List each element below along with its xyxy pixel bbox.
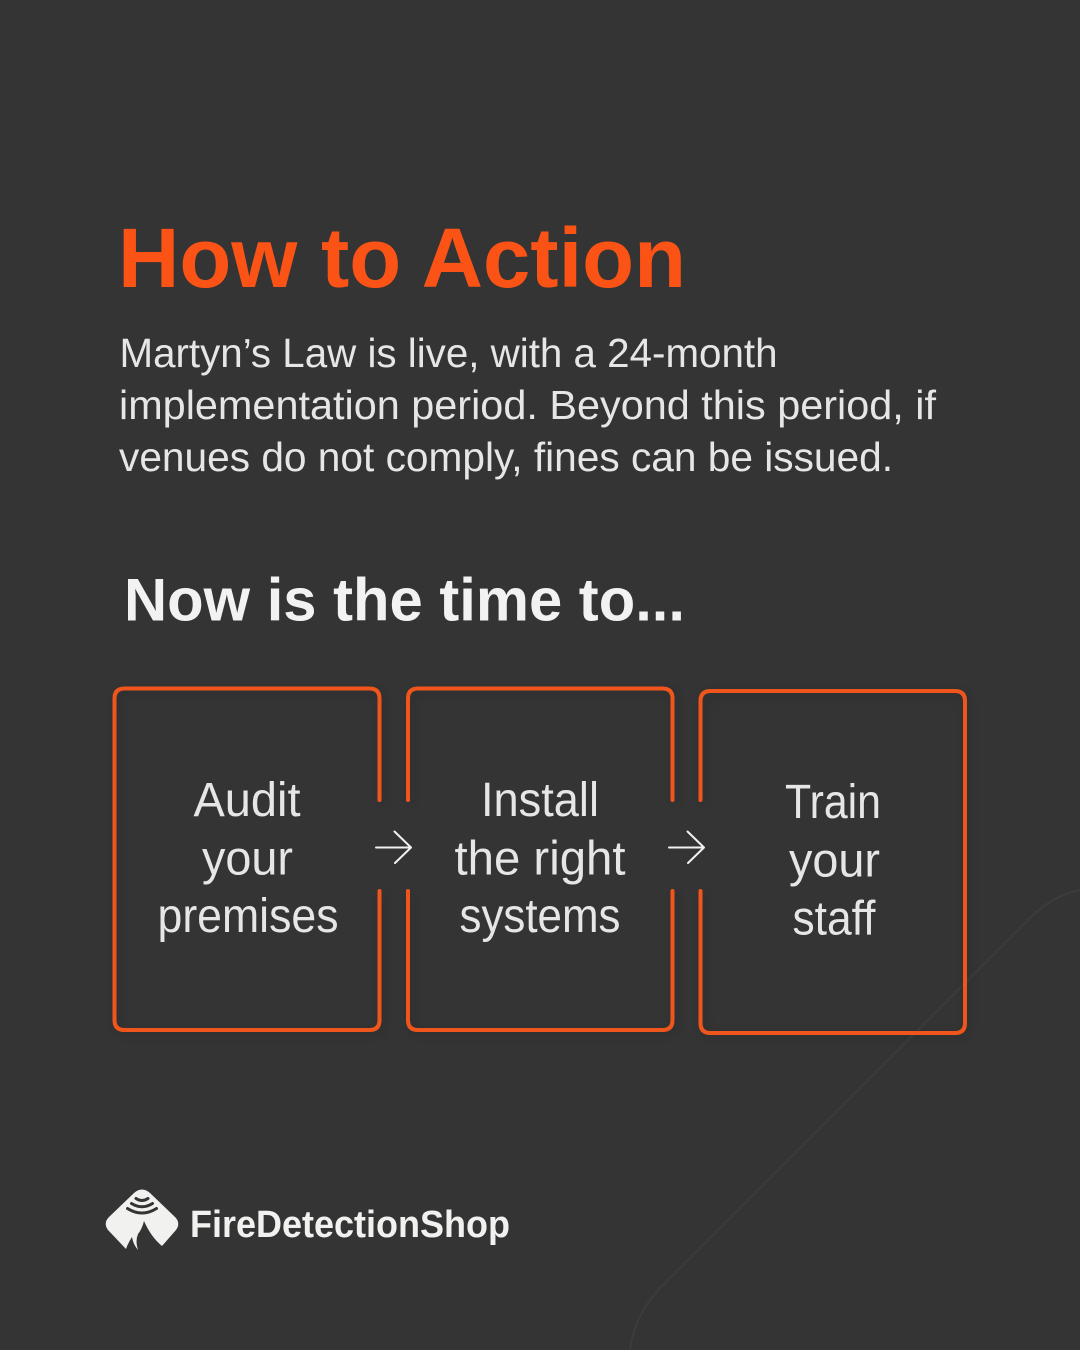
wordmark: FireDetectionShop bbox=[190, 1204, 510, 1246]
panel: train your staff: staff bbox=[792, 892, 876, 946]
panel: audit your premises: premises bbox=[158, 890, 338, 943]
panel: audit your premises bbox=[114, 688, 380, 1030]
intro paragraph bbox=[119, 330, 937, 480]
icon: logo mark bbox=[106, 1190, 178, 1250]
arrow: install to train bbox=[669, 832, 704, 863]
intro paragraph: Martyn’s Law is live, with a 24-month bbox=[120, 330, 778, 376]
arrow: audit to install bbox=[376, 832, 411, 863]
panel: install the right systems: systems bbox=[460, 890, 620, 943]
panel: audit your premises: your bbox=[202, 832, 293, 886]
subheading: Now is the time to... bbox=[124, 566, 685, 634]
intro paragraph: implementation period. Beyond this period, if bbox=[119, 382, 937, 428]
panel: train your staff: Train bbox=[785, 776, 881, 829]
panel: install the right systems: Install bbox=[481, 774, 599, 827]
panel: install the right systems: the right bbox=[454, 832, 626, 886]
logo: FireDetectionShop bbox=[106, 1190, 510, 1250]
intro paragraph: venues do not comply, fines can be issued. bbox=[119, 434, 893, 480]
title: How to Action bbox=[118, 211, 686, 305]
panel: audit your premises: Audit bbox=[194, 774, 300, 827]
panel: install the right systems bbox=[408, 688, 672, 1030]
panel: train your staff: your bbox=[789, 834, 880, 888]
panel: train your staff bbox=[700, 691, 965, 1033]
